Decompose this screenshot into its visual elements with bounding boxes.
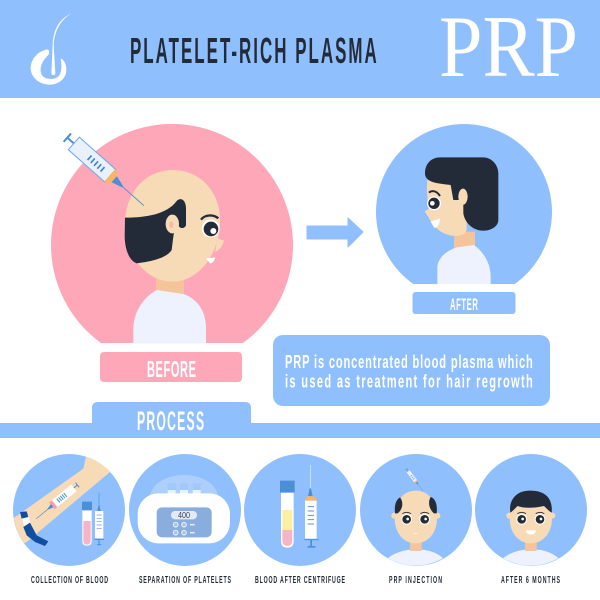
title: PLATELET-RICH PLASMA (130, 31, 377, 71)
step 4: PRP injection (360, 454, 472, 570)
panel: after (376, 124, 552, 284)
display reading: 400 (178, 510, 190, 520)
step 3: blood after centrifuge (244, 454, 356, 566)
step 4 label: PRP INJECTION (389, 573, 442, 586)
balding man with syringe (388, 468, 443, 566)
callout: PRP definition: PRP is concentrated blood plasma which (285, 352, 533, 373)
step 2: separation of platelets (129, 454, 241, 566)
step 5: after 6 months (475, 454, 587, 570)
step 1 label: COLLECTION OF BLOOD (31, 573, 108, 586)
AFTER label (412, 292, 516, 314)
step 1: collection of blood (10, 453, 125, 566)
step 2 label: SEPARATION OF PLATELETS (139, 573, 231, 586)
BEFORE label: BEFORE (147, 357, 196, 382)
after figure (425, 157, 498, 284)
step 3 label: BLOOD AFTER CENTRIFUGE (255, 573, 345, 586)
callout: PRP definition: is used as treatment for hair regrowth (285, 372, 533, 392)
icon: syringe (61, 131, 149, 212)
test tube and syringe (280, 465, 319, 548)
BEFORE label (100, 352, 242, 382)
process heading band: PROCESS (137, 407, 204, 436)
process heading band (0, 402, 600, 438)
centrifuge (138, 475, 230, 543)
arm with syringe, tube and syringe (14, 456, 110, 546)
step 5 label: AFTER 6 MONTHS (501, 573, 560, 586)
PRP heading: PRP (439, 0, 578, 96)
header band (0, 0, 600, 98)
before figure (125, 170, 224, 343)
callout: PRP definition (273, 335, 550, 406)
AFTER label: AFTER (450, 295, 478, 314)
icon: hair follicle (31, 13, 72, 85)
arrow (307, 218, 363, 247)
panel: before (51, 124, 293, 343)
man with regrown hair (503, 490, 558, 566)
